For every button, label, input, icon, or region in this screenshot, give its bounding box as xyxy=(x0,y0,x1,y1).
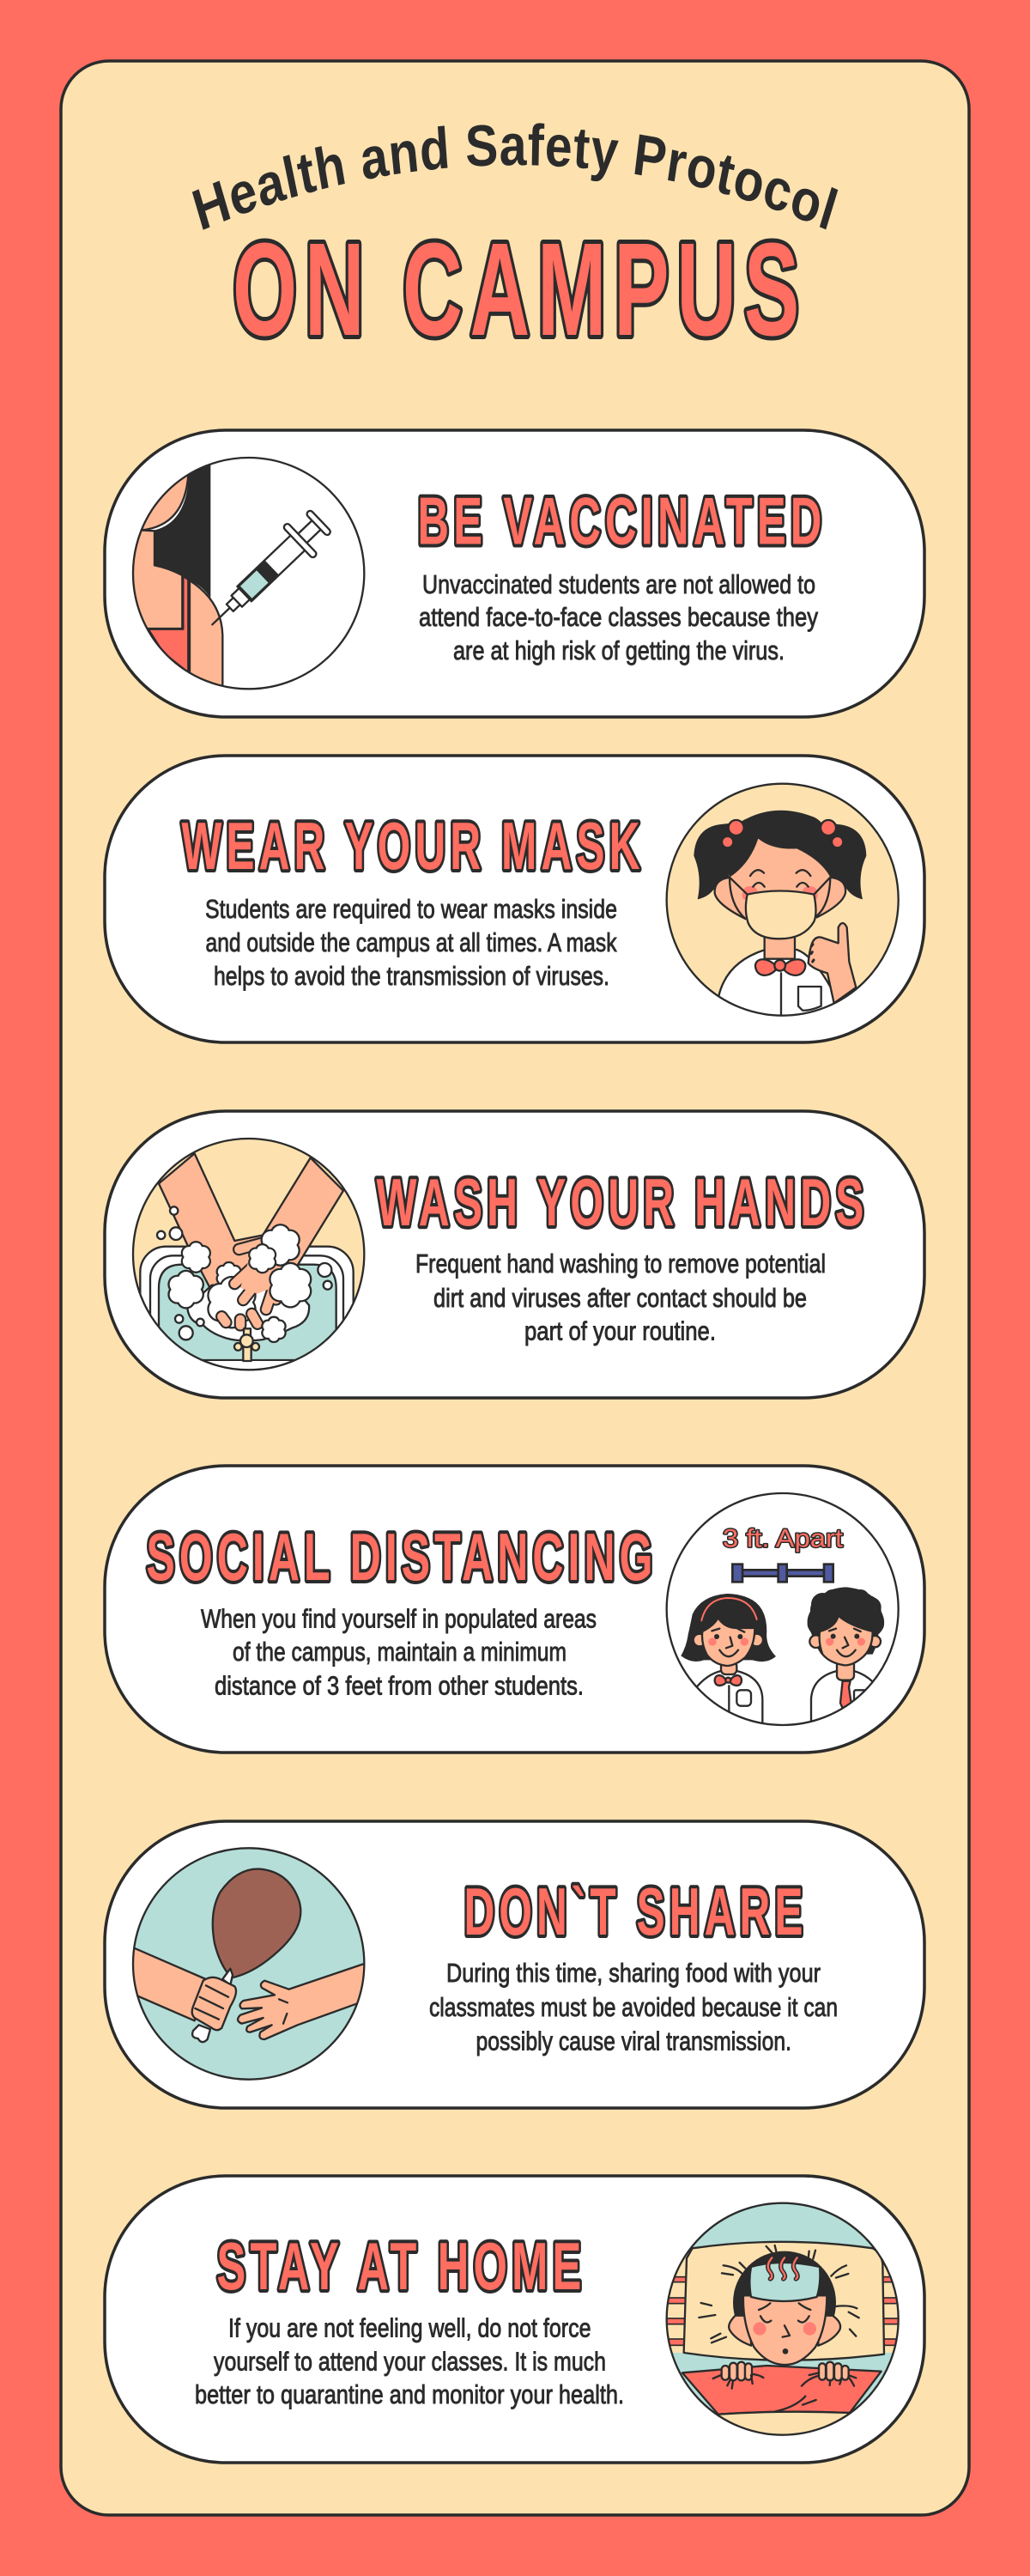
icon: sick boy in bed xyxy=(663,2201,901,2439)
body text: part of your routine. xyxy=(524,1315,716,1346)
icon: syringe and arm xyxy=(129,455,367,693)
body text: yourself to attend your classes. It is much xyxy=(214,2346,606,2377)
icon: girl wearing a mask xyxy=(663,781,901,1019)
body text: attend face-to-face classes because they xyxy=(419,602,818,632)
heading: DON`T SHARE xyxy=(464,1874,807,1949)
body text xyxy=(205,894,617,991)
icon part: measure bar xyxy=(732,1564,833,1582)
icon: sharing a chicken leg xyxy=(129,1846,369,2084)
panel: wash your hands xyxy=(105,1111,924,1406)
panel: don't share xyxy=(105,1821,924,2108)
panel: wear your mask xyxy=(105,756,924,1042)
panel: social distancing xyxy=(105,1466,924,1753)
heading: BE VACCINATED xyxy=(417,483,826,558)
body text: possibly cause viral transmission. xyxy=(476,2026,791,2056)
body text: Unvaccinated students are not allowed to xyxy=(422,569,815,599)
body text: better to quarantine and monitor your health. xyxy=(195,2379,624,2409)
body text: dirt and viruses after contact should be xyxy=(433,1283,807,1313)
body text: helps to avoid the transmission of viruses. xyxy=(214,961,609,991)
body text: Students are required to wear masks inside xyxy=(205,894,617,924)
body text xyxy=(429,1958,838,2056)
body text: classmates must be avoided because it can xyxy=(429,1992,838,2022)
body text xyxy=(415,1249,826,1346)
heading: STAY AT HOME xyxy=(216,2228,585,2304)
body text xyxy=(195,2313,624,2409)
icon part: tap xyxy=(234,1328,259,1361)
body text: and outside the campus at all times. A mask xyxy=(206,927,617,957)
body text: are at high risk of getting the virus. xyxy=(453,635,785,665)
icon: two students three feet apart xyxy=(663,1492,901,1728)
panel: be vaccinated xyxy=(105,430,924,717)
icon label: 3 ft apart: 3 ft. Apart xyxy=(723,1524,843,1552)
icon part: syringe xyxy=(197,505,336,641)
body text: of the campus, maintain a minimum xyxy=(233,1637,566,1667)
body text xyxy=(419,569,818,665)
body text: When you find yourself in populated areas xyxy=(201,1604,597,1633)
body text xyxy=(201,1604,597,1700)
icon part: fingers xyxy=(221,1242,276,1325)
icon part: boy xyxy=(808,1587,890,1726)
panel: stay at home xyxy=(105,2176,924,2463)
body text: Frequent hand washing to remove potential xyxy=(415,1249,826,1279)
body text: distance of 3 feet from other students. xyxy=(215,1671,584,1700)
heading: WEAR YOUR MASK xyxy=(182,808,644,884)
icon part: girl xyxy=(681,1594,776,1726)
icon: hands washing in sink xyxy=(132,1137,366,1370)
body text: If you are not feeling well, do not force xyxy=(228,2313,591,2342)
body text: During this time, sharing food with your xyxy=(446,1958,821,1988)
icon part: fingers on blanket xyxy=(722,2362,849,2380)
heading: arched title: Health and Safety Protocol xyxy=(192,123,838,230)
heading: SOCIAL DISTANCING xyxy=(146,1519,657,1595)
